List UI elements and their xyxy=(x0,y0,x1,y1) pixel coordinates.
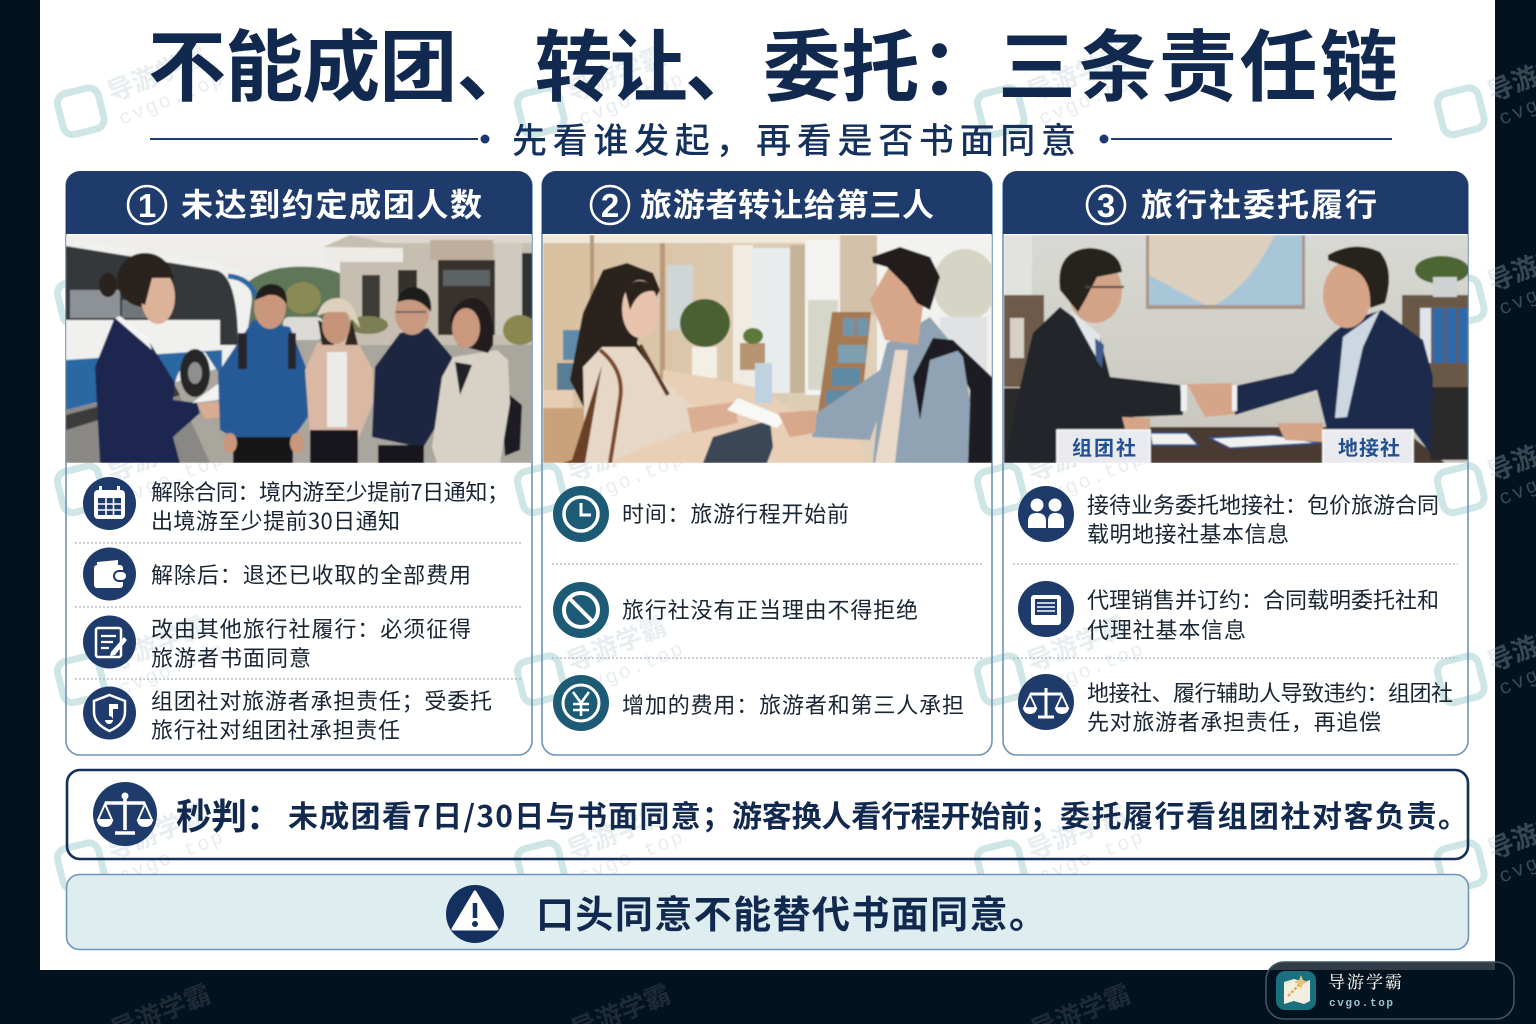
list: panel 3 rules: 代理社基本信息 xyxy=(1087,613,1246,645)
title: 转让、 xyxy=(534,6,763,118)
icon: wallet xyxy=(83,548,136,600)
list: panel 2 rules: 增加的费用：旅游者和第三人承担 xyxy=(622,688,964,720)
photo: reception transfer xyxy=(543,235,997,463)
panel 1 header: 未达到约定成团人数 xyxy=(181,180,482,226)
list: panel 3 rules: 载明地接社基本信息 xyxy=(1087,517,1289,549)
watermark layer: 导游学霸 xyxy=(1021,416,1131,489)
watermark layer: cvgo.top xyxy=(576,448,688,511)
panel: 未达到约定成团人数 xyxy=(66,171,537,755)
summary text: 未成团看7日/30日与书面同意； xyxy=(288,792,732,836)
list: panel 2 rules: 时间：旅游行程开始前 xyxy=(622,497,849,529)
title xyxy=(148,6,1398,118)
summary text xyxy=(288,792,1468,836)
list: panel 2 rules: 旅行社没有正当理由不得拒绝 xyxy=(622,593,918,625)
panel 2 header xyxy=(542,171,992,234)
panel 3 header xyxy=(1003,171,1468,234)
list: panel 1 rules: 组团社对旅游者承担责任；受委托 xyxy=(151,684,492,716)
watermark layer: 导游学霸 xyxy=(561,794,671,867)
watermark layer: cvgo.top xyxy=(1036,68,1148,131)
summary bar: 秒判: 秒判： xyxy=(176,788,282,840)
watermark layer: 导游学霸 xyxy=(561,416,671,489)
watermark layer: cvgo.top xyxy=(116,638,228,701)
watermark layer: cvgo.top xyxy=(116,68,228,131)
list: panel 1 rules: 改由其他旅行社履行：必须征得 xyxy=(151,612,471,644)
man in navy xyxy=(372,328,452,448)
panel: 旅行社委托履行 xyxy=(1003,171,1469,755)
panel 2 header: 2 xyxy=(601,187,619,224)
icon: calendar xyxy=(83,477,136,530)
watermark layer: 导游学霸 xyxy=(1021,606,1131,679)
name plate labels: 地接社 xyxy=(1338,432,1400,461)
icon: large scales xyxy=(93,782,157,846)
warning bar: 口头同意不能替代书面同意。 xyxy=(536,884,1047,939)
list: panel 1 rules xyxy=(75,475,523,745)
list: panel 3 rules: 接待业务委托地接社：包价旅游合同 xyxy=(1087,488,1439,520)
title: 委托： xyxy=(763,6,998,118)
list: panel 1 rules: 出境游至少提前30日通知 xyxy=(151,504,400,536)
panel 2 header: 旅游者转让给第三人 xyxy=(640,180,934,226)
title: 三条责任链 xyxy=(998,6,1398,118)
panel 3 header: 3 xyxy=(1097,187,1115,224)
watermark layer: cvgo.top xyxy=(1036,638,1148,701)
panel 1 header: 1 xyxy=(138,187,156,224)
paper xyxy=(727,398,787,428)
bus xyxy=(66,284,254,383)
rack xyxy=(818,312,871,412)
summary bar: 秒判 xyxy=(67,770,1468,859)
name plate labels: 组团社 xyxy=(1072,432,1136,461)
watermark layer: 导游学霸 xyxy=(101,606,211,679)
watermark layer: 导游学霸 xyxy=(101,36,211,109)
photo: guide and tourists at bus xyxy=(66,235,537,463)
title: 不能成团、 xyxy=(148,6,534,118)
icon: warning triangle xyxy=(446,885,504,943)
watermark layer: cvgo.top xyxy=(576,826,688,889)
watermark layer: cvgo.top xyxy=(116,826,228,889)
icon: yen xyxy=(553,675,609,731)
watermark layer: 导游学霸 xyxy=(101,416,211,489)
watermark layer: 导游学霸 xyxy=(1021,794,1131,867)
table xyxy=(1090,426,1445,463)
watermark layer: cvgo.top xyxy=(1036,448,1148,511)
watermark layer: cvgo.top xyxy=(1036,826,1148,889)
name plate labels xyxy=(1072,438,1400,458)
left man xyxy=(1005,307,1183,463)
right man xyxy=(1230,310,1433,453)
list: panel 3 rules: 先对旅游者承担责任，再追偿 xyxy=(1087,705,1381,737)
watermark layer: 导游学霸 xyxy=(561,36,671,109)
brand badge: cvgo.top xyxy=(1329,998,1393,1010)
icon: people xyxy=(1018,486,1074,542)
watermark layer: cvgo.top xyxy=(576,68,688,131)
guide xyxy=(95,317,200,463)
monitor xyxy=(703,420,773,463)
subtitle: 先看谁发起，再看是否书面同意 xyxy=(512,113,1076,164)
list: panel 1 rules: 旅游者书面同意 xyxy=(151,641,311,673)
icon: document with pen xyxy=(83,616,136,668)
man in blue xyxy=(218,320,308,438)
list: panel 1 rules: 解除后：退还已收取的全部费用 xyxy=(151,558,471,590)
watermark layer: cvgo.top xyxy=(116,448,228,511)
watermark layer: 导游学霸 xyxy=(561,606,671,679)
icon: prohibited xyxy=(553,582,609,638)
watermark layer: cvgo.top xyxy=(576,638,688,701)
icon: clock xyxy=(553,486,609,542)
list: panel 3 rules xyxy=(1013,486,1458,737)
warning bar xyxy=(66,874,1468,950)
panel 3 header: 旅行社委托履行 xyxy=(1141,180,1377,226)
woman xyxy=(570,262,661,408)
brand badge: 导游学霸 xyxy=(1328,968,1402,993)
subtitle xyxy=(150,113,1392,164)
list: panel 2 rules xyxy=(552,486,982,731)
panel: 旅游者转让给第三人 xyxy=(542,171,997,755)
summary text: 委托履行看组团社对客负责。 xyxy=(1060,792,1468,836)
icon: scales xyxy=(1018,674,1074,730)
watermark layer: 导游学霸 xyxy=(101,794,211,867)
summary text: 游客换人看行程开始前； xyxy=(732,792,1060,836)
photo: handshake xyxy=(1004,235,1469,464)
icon: map logo xyxy=(1276,971,1316,1010)
watermark layer: 导游学霸 xyxy=(1021,36,1131,109)
icon: shield xyxy=(83,686,136,740)
list: panel 1 rules: 旅行社对组团社承担责任 xyxy=(151,713,400,745)
list: panel 3 rules: 代理销售并订约：合同载明委托社和 xyxy=(1087,583,1439,615)
woman in cream xyxy=(503,394,523,456)
brand badge xyxy=(1266,962,1514,1019)
icon: contract xyxy=(1018,581,1074,637)
panel 1 header xyxy=(66,171,532,234)
list: panel 1 rules: 解除合同：境内游至少提前7日通知； xyxy=(151,475,509,507)
woman in hat xyxy=(305,340,373,443)
man xyxy=(950,340,992,463)
list: panel 3 rules: 地接社、履行辅助人导致违约：组团社 xyxy=(1087,676,1453,708)
